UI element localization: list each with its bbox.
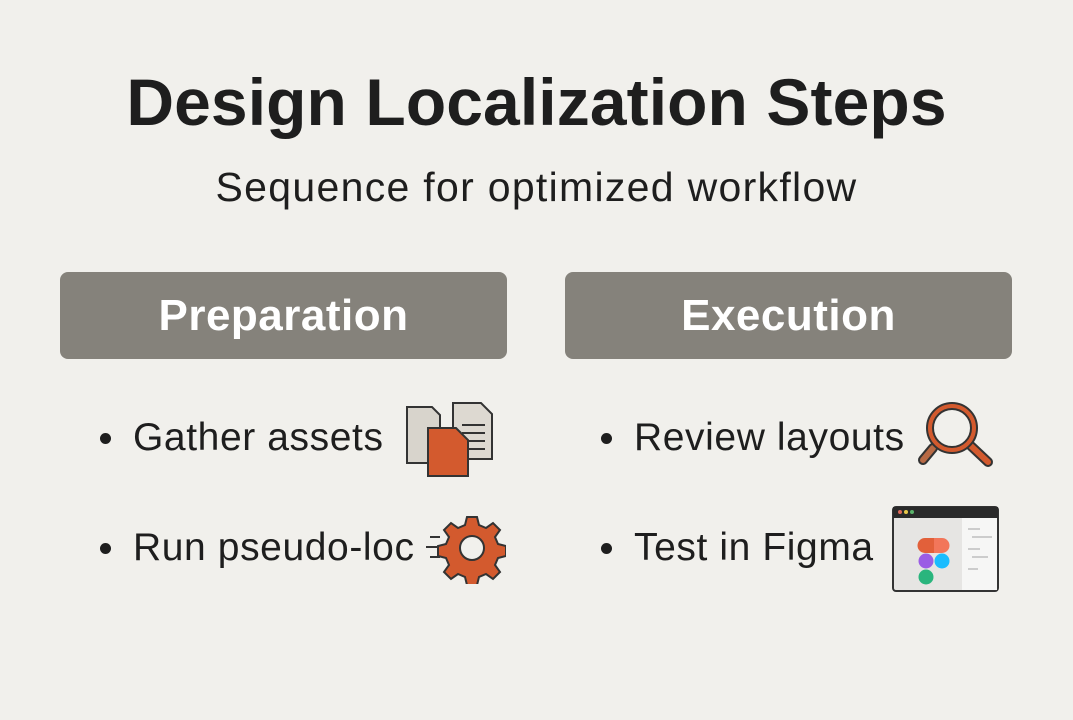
- bullet: Gather assets: Gather assets: [133, 416, 384, 459]
- header: Execution: [565, 272, 1012, 359]
- icon: documents: [406, 402, 493, 477]
- bullet: Run pseudo-loc: Run pseudo-loc: [133, 526, 415, 569]
- icon: figma window: [892, 506, 999, 592]
- header: Execution: Execution: [681, 290, 896, 340]
- bullet: Review layouts: Review layouts: [634, 416, 905, 459]
- header: Preparation: Preparation: [158, 290, 408, 340]
- icon: gear: [426, 516, 506, 584]
- icon: magnifier: [918, 402, 993, 467]
- title: Design Localization Steps: [126, 65, 947, 139]
- subtitle: Sequence for optimized workflow: [216, 164, 857, 210]
- header: Preparation: [60, 272, 507, 359]
- bullet: Test in Figma: Test in Figma: [634, 526, 874, 569]
